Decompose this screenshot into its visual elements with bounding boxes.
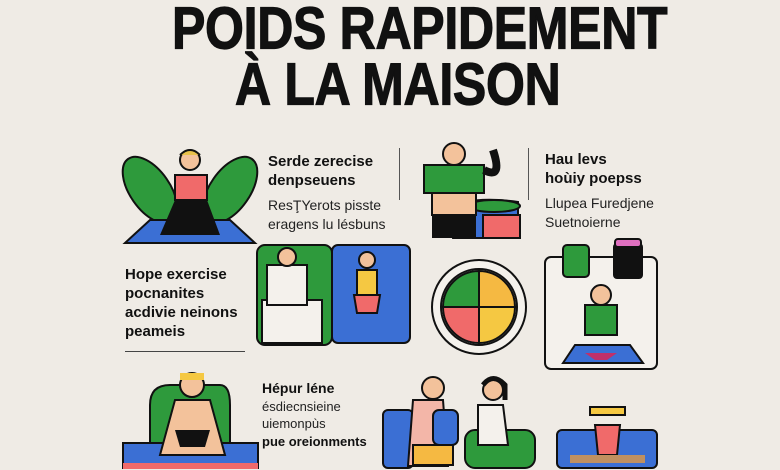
text block: bottom: pue oreionments [262,434,367,449]
text block: top left: Serde zerecise denpseuens [268,153,373,189]
text block: top left: ResŢYerots pisste eragens lu lésbuns [268,197,386,232]
text block: top right [545,151,654,230]
title: À LA MAISON [235,51,560,118]
illustration: man flexing [423,142,521,239]
text block: top right: Hau levs [545,151,607,168]
illustration: people bottom middle [382,376,536,469]
title [172,0,668,118]
illustration: kitchen bottom right [556,406,658,469]
text block: top right: Suetnoierne [545,214,621,230]
text block: bottom [262,380,367,449]
text block: top right: hoùiy poepss [545,170,642,187]
text block: top left [268,153,386,232]
text block: top right: Llupea Furedjene [545,195,654,211]
text block: bottom: ésdiecnsieine uiemonpùs [262,399,341,431]
illustration: plate [431,259,527,355]
illustration: man sitting [122,372,259,469]
illustration: woman with jars [544,238,658,370]
divider lines [399,148,400,200]
illustration: two panel scene [256,244,411,346]
illustration: woman yoga with leaves [122,149,258,244]
text block: middle left: Hope exercise pocnanites acdivie neinons peameis [125,266,238,340]
text block: bottom: Hépur léne [262,380,334,396]
